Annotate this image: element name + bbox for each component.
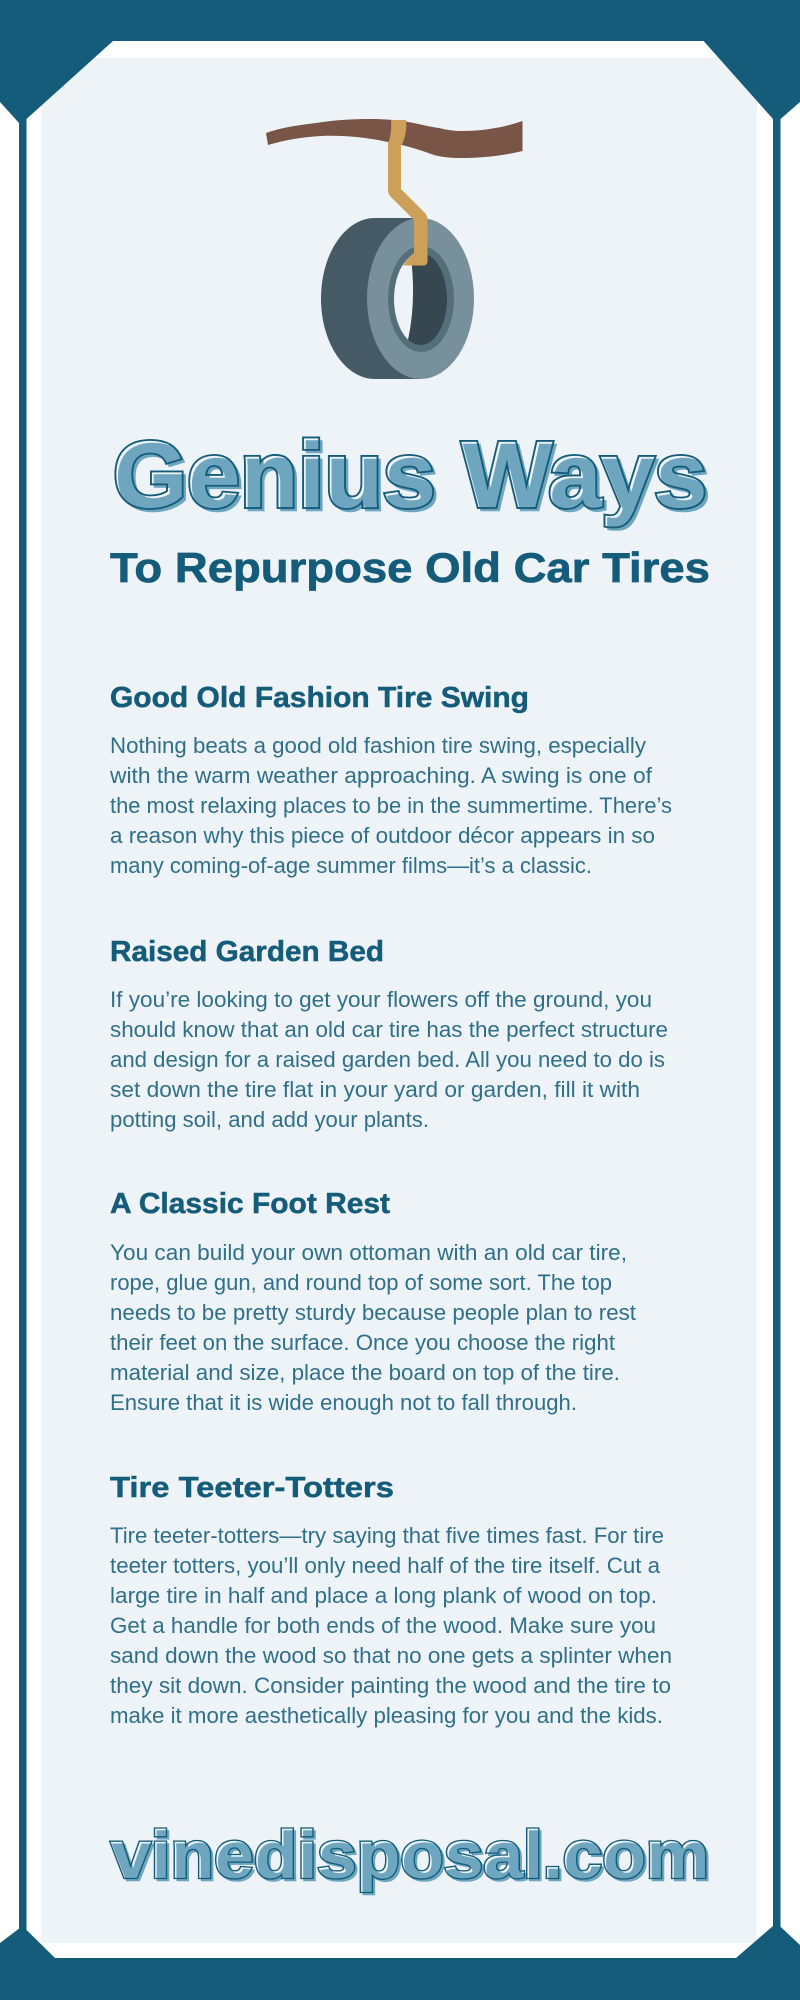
section: Good Old Fashion Tire Swing [109, 682, 672, 878]
heading: Tire Teeter-Totters [110, 1472, 394, 1504]
body text: Nothing beats a good old fashion tire swing, especially [110, 733, 646, 758]
section: Raised Garden Bed [110, 936, 668, 1132]
heading: A Classic Foot Rest [110, 1188, 390, 1220]
body text: and design for a raised garden bed. All you need to do is [110, 1047, 665, 1072]
body text: should know that an old car tire has the perfect structure [110, 1017, 668, 1042]
body text: material and size, place the board on top of the tire. [110, 1360, 620, 1385]
body text [109, 733, 672, 878]
section: Tire Teeter-Totters [110, 1472, 672, 1728]
heading: Raised Garden Bed [110, 936, 384, 968]
icon: rope [388, 120, 428, 266]
icon: tree branch [266, 119, 522, 158]
body text: potting soil, and add your plants. [110, 1107, 429, 1132]
body text: teeter totters, you’ll only need half of the tire itself. Cut a [110, 1553, 661, 1578]
icon: tire swing [266, 119, 522, 379]
title: Genius Ways: Genius Ways [113, 422, 707, 526]
footer: website: vinedisposal.com [114, 1820, 712, 1895]
body text: Tire teeter-totters—try saying that five times fast. For tire [110, 1523, 664, 1548]
body text: with the warm weather approaching. A swing is one of [109, 763, 653, 788]
body text: large tire in half and place a long plank of wood on top. [110, 1583, 657, 1608]
body text: their feet on the surface. Once you choose the right [110, 1330, 615, 1355]
icon: tire [321, 218, 474, 379]
body text: they sit down. Consider painting the wood and the tire to [110, 1673, 671, 1698]
body text: Ensure that it is wide enough not to fall through. [110, 1390, 577, 1415]
body text: rope, glue gun, and round top of some sort. The top [110, 1270, 612, 1295]
body text [110, 1240, 636, 1415]
body text: the most relaxing places to be in the summertime. There’s [110, 793, 672, 818]
body text: If you’re looking to get your flowers off the ground, you [110, 987, 652, 1012]
body text [110, 987, 668, 1132]
body text [110, 1523, 672, 1728]
body text: needs to be pretty sturdy because people plan to rest [110, 1300, 636, 1325]
heading: Good Old Fashion Tire Swing [110, 682, 529, 714]
title: Genius Ways: Genius Ways [116, 426, 710, 530]
body text: make it more aesthetically pleasing for you and the kids. [110, 1703, 663, 1728]
body text: You can build your own ottoman with an old car tire, [110, 1240, 627, 1265]
section: A Classic Foot Rest [110, 1188, 636, 1415]
body text: Get a handle for both ends of the wood. Make sure you [110, 1613, 656, 1638]
body text: many coming-of-age summer films—it’s a classic. [110, 853, 592, 878]
body text: set down the tire flat in your yard or garden, fill it with [110, 1077, 640, 1102]
body text: sand down the wood so that no one gets a splinter when [110, 1643, 672, 1668]
subtitle: To Repurpose Old Car Tires [110, 544, 710, 591]
footer: website: vinedisposal.com [111, 1818, 709, 1892]
body text: a reason why this piece of outdoor décor appears in so [110, 823, 655, 848]
